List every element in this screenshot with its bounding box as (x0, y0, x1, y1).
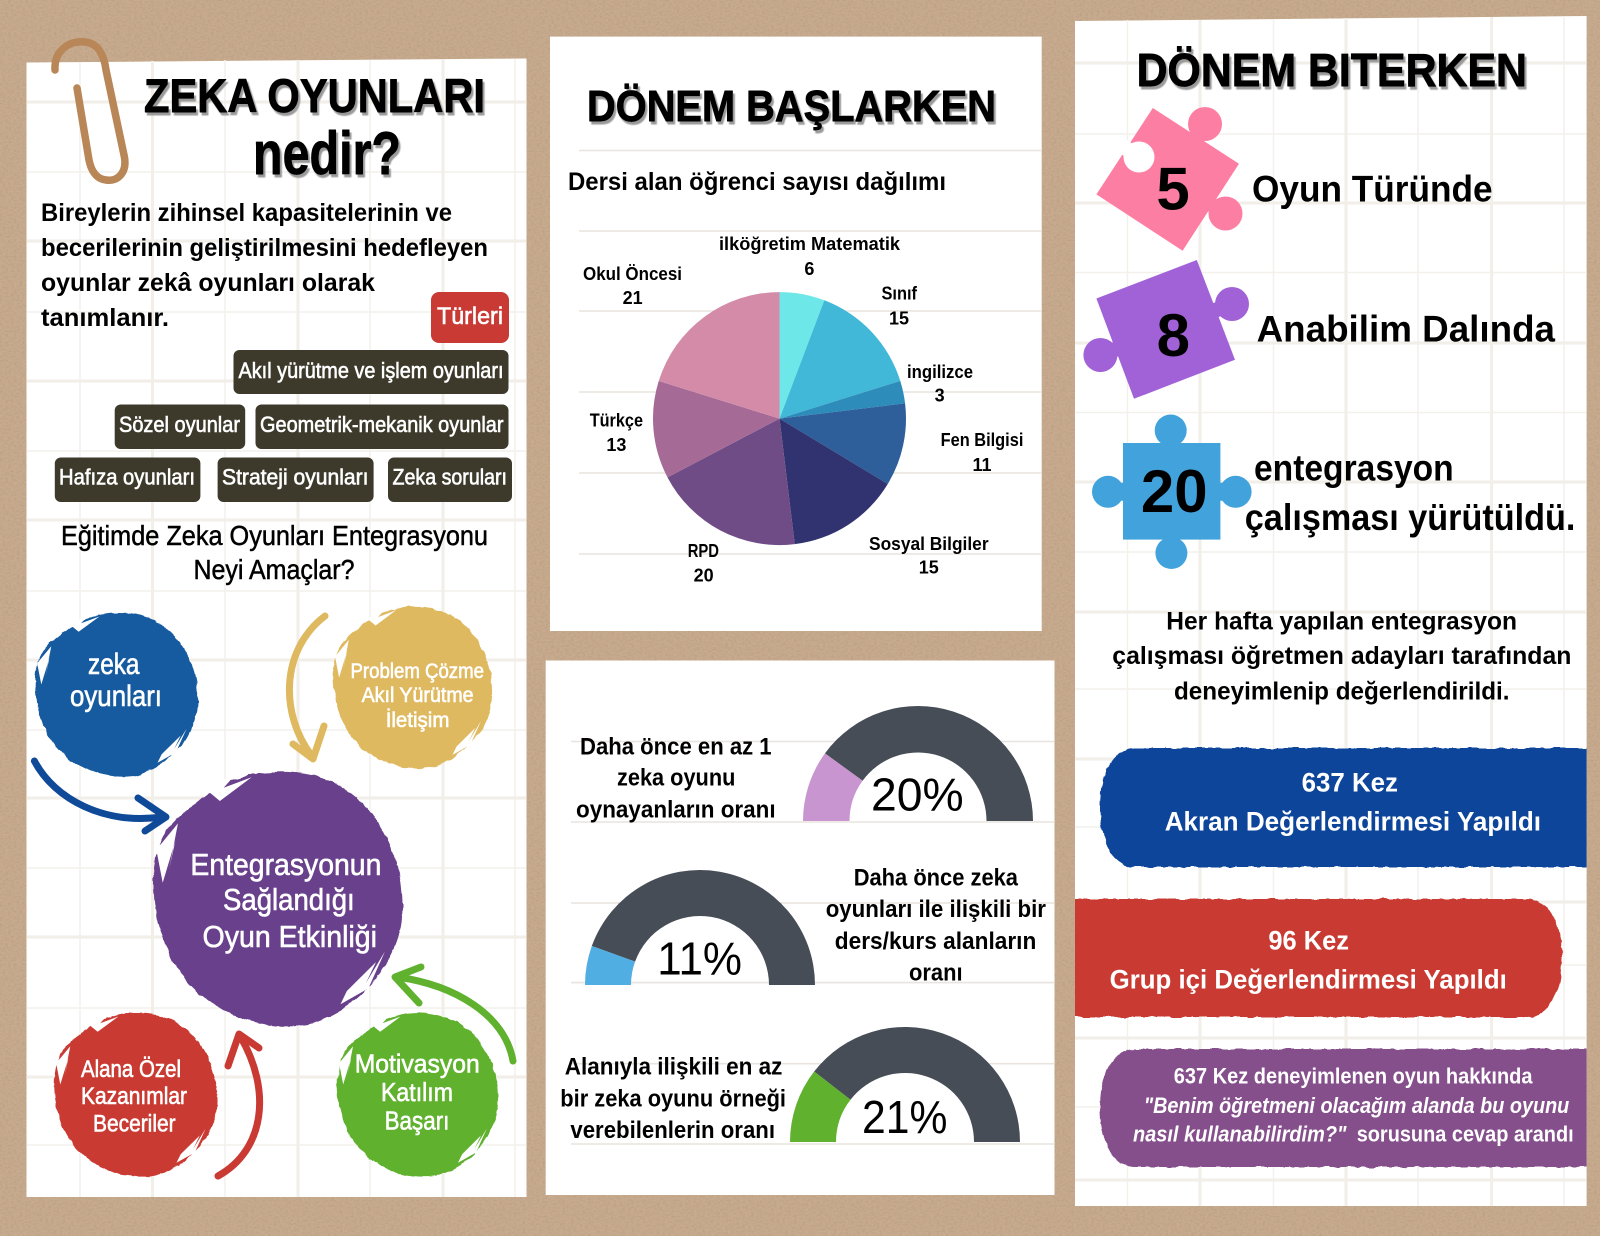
text: anabilim dalında: Anabilim Dalında (1257, 309, 1555, 350)
label: türleri (431, 292, 509, 343)
tag: strateji: Strateji oyunları (222, 464, 368, 490)
banner: grup içi değerlendirme: Grup içi Değerlendirmesi Yapıldı (1110, 965, 1507, 995)
tag: akıl yürütme: Akıl yürütme ve işlem oyunları (238, 358, 504, 383)
icon: puzzle 5: 5 (1156, 156, 1190, 223)
banner: deneyimlenen oyun (1100, 1049, 1600, 1167)
tag: zeka soruları (388, 458, 512, 502)
blob: entegrasyon etkinliği: Oyun Etkinliği (202, 919, 377, 954)
pie labels: ingilizce (907, 362, 973, 382)
blob: entegrasyon etkinliği (153, 771, 403, 1026)
heading: entegrasyon amaç: Eğitimde Zeka Oyunları Entegrasyonu (61, 520, 488, 551)
label: türleri: Türleri (437, 303, 503, 330)
pie chart (653, 292, 906, 545)
banner: deneyimlenen oyun: sorusuna cevap arandı (1357, 1122, 1574, 1147)
tag: hafıza: Hafıza oyunları (59, 464, 195, 490)
panel: dönem başlarken (550, 37, 1042, 631)
text: gauge 1 label: Daha önce en az 1 (580, 734, 772, 761)
blob: entegrasyon etkinliği: Entegrasyonun (190, 847, 381, 882)
text block: haftalık çalışma: çalışması öğretmen adayları tarafından (1112, 642, 1571, 670)
tag: sözel: Sözel oyunlar (119, 412, 240, 437)
text: gauge 2 label (826, 864, 1046, 987)
text: gauge 2 label: ders/kurs alanların (835, 928, 1036, 955)
title: dönem başlarken: DÖNEM BAŞLARKEN (587, 82, 996, 131)
text: gauge 1 label (576, 734, 776, 823)
blob: zeka oyunları: zeka (88, 648, 140, 681)
blob: alana özel (54, 1012, 217, 1177)
banner: akran değerlendirmesi: Akran Değerlendirmesi Yapıldı (1165, 806, 1541, 836)
blob: problem çözme (333, 606, 492, 769)
gauge: 20% (803, 706, 1033, 821)
text: gauge 2 label: Daha önce zeka (854, 864, 1019, 891)
arrow: blue (34, 761, 166, 831)
blob: entegrasyon etkinliği: Sağlandığı (223, 882, 355, 917)
text block: haftalık çalışma: deneyimlenip değerlendirildi. (1174, 677, 1510, 705)
title: zeka oyunları nedir: ZEKA OYUNLARI (144, 69, 485, 122)
banner: grup içi değerlendirme (1060, 899, 1562, 1017)
blob: motivasyon (337, 1012, 498, 1177)
pie labels: 11 (972, 455, 992, 475)
gauge: 20%: 20% (871, 769, 964, 821)
tag: strateji (218, 458, 374, 502)
tag: geometrik (256, 404, 508, 449)
panel: zeka oyunları nedir (26, 42, 526, 1197)
pie labels: 15 (919, 558, 939, 578)
pie labels (583, 234, 1023, 586)
tag: zeka soruları: Zeka soruları (392, 464, 507, 490)
gauge: 21% (790, 1027, 1020, 1143)
tag: sözel (115, 404, 245, 449)
blob: motivasyon: Katılım (381, 1077, 453, 1107)
icon: puzzle 20 (1092, 414, 1252, 569)
text block: haftalık çalışma: Her hafta yapılan entegrasyon (1166, 608, 1517, 636)
text: gauge 3 label: bir zeka oyunu örneği (560, 1086, 786, 1113)
text block: definition: becerilerinin geliştirilmesini hedefleyen (41, 234, 488, 262)
text block: definition (41, 199, 488, 332)
text block: haftalık çalışma (1112, 608, 1571, 705)
banner: deneyimlenen oyun: nasıl kullanabilirdim?" (1133, 1122, 1347, 1147)
gauge: 21%: 21% (862, 1091, 947, 1143)
pie labels: 15 (889, 308, 909, 328)
icon: puzzle 8 (1083, 260, 1249, 399)
banner: akran değerlendirmesi (1100, 748, 1600, 867)
text: gauge 3 label: Alanıyla ilişkili en az (565, 1054, 782, 1080)
arrow: green (395, 967, 513, 1061)
blob: zeka oyunları: oyunları (70, 680, 162, 713)
pie labels: Sınıf (882, 284, 918, 304)
icon: puzzle 5 (1096, 107, 1242, 251)
subtitle: öğrenci dağılımı: Dersi alan öğrenci sayısı dağılımı (568, 168, 946, 196)
text: entegrasyon çalışması: çalışması yürütüldü. (1245, 497, 1575, 538)
banner: akran değerlendirmesi: 637 Kez (1302, 768, 1398, 798)
icon: puzzle 8: 8 (1157, 302, 1190, 369)
title: dönem biterken: DÖNEM BITERKEN (1137, 44, 1527, 96)
tag: geometrik: Geometrik-mekanik oyunlar (260, 412, 504, 437)
text: gauge 2 label: oyunları ile ilişkili bir (826, 896, 1046, 923)
text: gauge 1 label: oynayanların oranı (576, 796, 776, 823)
pie labels: Türkçe (590, 410, 643, 430)
banner: grup içi değerlendirme: 96 Kez (1268, 926, 1349, 956)
text block: definition: tanımlanır. (41, 304, 169, 332)
blob: zeka oyunları (35, 612, 198, 777)
gauge: 11%: 11% (657, 932, 742, 984)
text: entegrasyon çalışması: entegrasyon (1254, 447, 1454, 488)
pie labels: 3 (935, 386, 945, 406)
text block: definition: oyunlar zekâ oyunları olarak (41, 269, 375, 297)
banner: deneyimlenen oyun: 637 Kez deneyimlenen oyun hakkında (1174, 1064, 1533, 1089)
blob: problem çözme: Problem Çözme (350, 660, 484, 683)
icon: paperclip (55, 42, 125, 180)
gauge: 11% (585, 870, 815, 985)
icon: puzzle 20: 20 (1141, 458, 1208, 525)
text block: definition: Bireylerin zihinsel kapasitelerinin ve (41, 199, 452, 227)
text: oyun türünde: Oyun Türünde (1252, 169, 1493, 210)
title: zeka oyunları nedir: nedir? (253, 120, 401, 187)
blob: alana özel: Alana Özel (81, 1056, 181, 1083)
text: entegrasyon çalışması (1245, 447, 1575, 538)
pie labels: 20 (694, 566, 714, 586)
text: gauge 3 label (560, 1054, 786, 1144)
arrow: red (218, 1034, 260, 1176)
tag: akıl yürütme (234, 350, 508, 394)
pie labels: Sosyal Bilgiler (869, 534, 989, 554)
blob: alana özel: Beceriler (93, 1110, 176, 1138)
panel: dönem biterken (1060, 16, 1600, 1206)
pie labels: RPD (688, 541, 719, 561)
panel: gauges (546, 660, 1054, 1195)
heading: entegrasyon amaç (61, 520, 488, 585)
tag: hafıza (55, 458, 200, 502)
text: gauge 3 label: verebilenlerin oranı (570, 1117, 775, 1144)
text: gauge 1 label: zeka oyunu (617, 765, 735, 792)
title: zeka oyunları nedir (144, 69, 485, 187)
pie labels: 13 (606, 435, 626, 455)
pie labels: ilköğretim Matematik (719, 234, 901, 254)
blob: problem çözme: İletişim (386, 709, 449, 732)
pie labels: 21 (623, 288, 643, 308)
pie labels: 6 (804, 259, 814, 279)
heading: entegrasyon amaç: Neyi Amaçlar? (194, 554, 354, 585)
blob: alana özel: Kazanımlar (81, 1083, 187, 1110)
pie labels: Okul Öncesi (583, 264, 682, 284)
arrow: gold (289, 616, 325, 759)
blob: motivasyon: Motivasyon (355, 1049, 480, 1079)
pie labels: Fen Bilgisi (941, 430, 1023, 450)
blob: problem çözme: Akıl Yürütme (362, 684, 474, 707)
text: gauge 2 label: oranı (909, 960, 963, 987)
blob: motivasyon: Başarı (385, 1105, 449, 1135)
